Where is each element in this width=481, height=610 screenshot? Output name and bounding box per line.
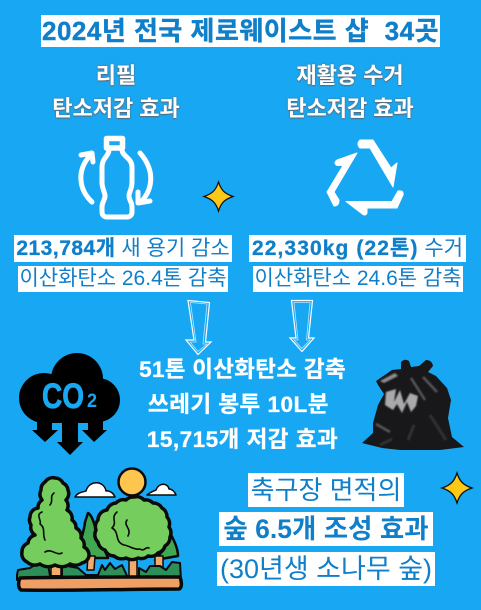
icon: refill bottle with circular arrows [78,136,154,220]
stat: recycling collected: 22,330kg (22톤) 수거 [252,237,463,260]
heading: refill carbon reduction: 리필 [96,63,136,88]
left tree [22,478,89,567]
stat: new containers reduced: 213,784개 새 용기 감소 [16,237,230,260]
callout: total CO2 and trash bag effect [139,357,346,452]
heading: refill carbon reduction [52,62,180,121]
icon: yellow sparkle center [202,180,235,213]
back trees [78,513,108,558]
icon: black garbage bag [362,360,464,450]
left tree trunk [51,560,61,577]
clouds [75,483,115,497]
icon: CO2 cloud with down arrows [19,353,120,455]
bag highlight [385,389,418,413]
CO2 label: CO [42,377,84,416]
callout: total CO2 and trash bag effect: 쓰레기 봉투 10L분 [148,392,329,417]
sun [118,468,146,496]
heading: recycling collection carbon reduction: 재활용 수거 [296,63,404,88]
right tree trunk [129,558,137,578]
stat: forest creation effect: 숲 6.5개 조성 효과 [223,514,429,544]
stat: refill CO2 reduction: 이산화탄소 26.4톤 감축 [19,267,227,290]
tree detail lines [39,493,149,554]
stat: recycling CO2 reduction: 이산화탄소 24.6톤 감축 [254,267,462,290]
heading: refill carbon reduction: 탄소저감 효과 [52,96,180,121]
soil [19,577,181,590]
title: 2024년 전국 제로웨이스트 샵 34곳 [42,16,439,46]
stat: football field area: 축구장 면적의 [251,475,401,505]
callout: total CO2 and trash bag effect: 15,715개 저감 효과 [147,427,338,452]
arrow: right outlined down arrow [288,300,316,352]
callout: total CO2 and trash bag effect: 51톤 이산화탄소 감축 [139,357,346,382]
icon: yellow sparkle right [440,471,474,505]
stat: 30-year pine forest note: (30년생 소나무 숲) [220,554,432,584]
icon: CO2 cloud with down arrows: 2 [87,391,97,412]
ground plants [17,562,181,581]
heading: recycling collection carbon reduction: 탄소저감 효과 [286,96,414,121]
right tree [95,497,171,560]
arrow: left outlined down arrow [184,300,212,356]
illustration: forest with sun and clouds [16,467,184,592]
heading: recycling collection carbon reduction [286,62,414,121]
icon: recycling triangle arrows [326,140,404,216]
